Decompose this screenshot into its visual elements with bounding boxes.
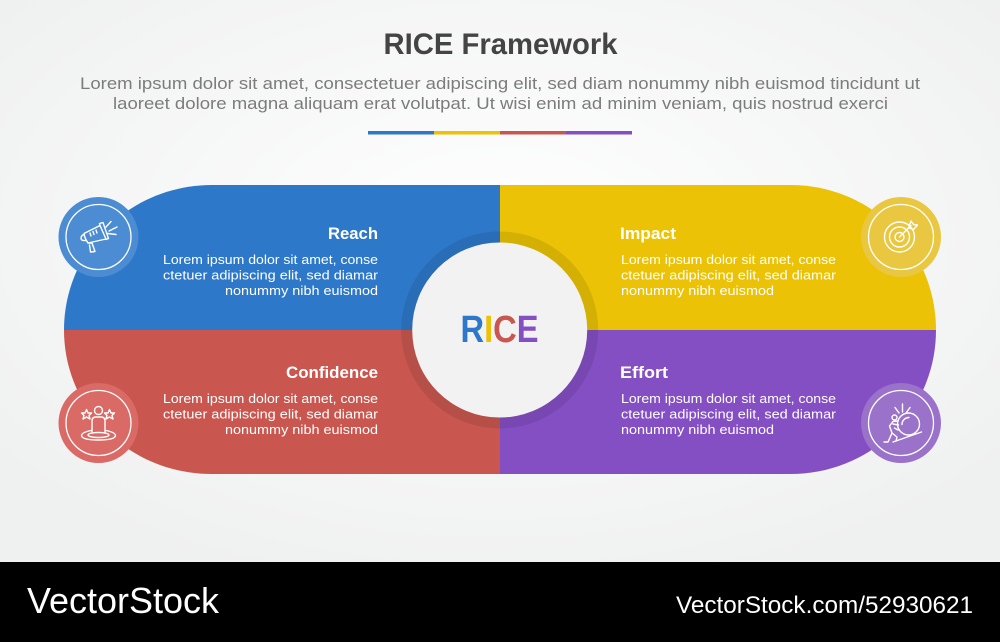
center label RICE: RICE bbox=[460, 309, 538, 351]
effort body text: Lorem ipsum dolor sit amet, conse bbox=[621, 391, 836, 406]
confidence body text: nonummy nibh euismod bbox=[225, 422, 378, 437]
reach heading: Reach bbox=[328, 224, 378, 243]
panel: reach bbox=[64, 185, 500, 330]
icon: megaphone bbox=[58, 197, 138, 277]
reach body text bbox=[163, 252, 379, 298]
effort heading: Effort bbox=[620, 363, 668, 382]
impact body text: Lorem ipsum dolor sit amet, conse bbox=[621, 252, 836, 267]
impact body text bbox=[621, 252, 837, 298]
subtitle text bbox=[80, 74, 920, 113]
effort body text bbox=[621, 391, 837, 437]
panel: impact bbox=[500, 185, 936, 330]
impact body text: nonummy nibh euismod bbox=[621, 283, 774, 298]
center circle bbox=[401, 232, 598, 428]
confidence heading: Confidence bbox=[286, 363, 378, 382]
confidence body text: Lorem ipsum dolor sit amet, conse bbox=[163, 391, 378, 406]
title: RICE Framework bbox=[384, 28, 618, 61]
icon: pushing boulder bbox=[861, 383, 941, 463]
impact body text: ctetuer adipiscing elit, sed diamar bbox=[621, 268, 837, 282]
icon: target bbox=[861, 197, 941, 277]
reach body text: nonummy nibh euismod bbox=[225, 283, 378, 298]
footer bar bbox=[0, 562, 1000, 642]
reach body text: ctetuer adipiscing elit, sed diamar bbox=[163, 268, 379, 282]
impact heading: Impact bbox=[620, 224, 676, 243]
confidence body text bbox=[163, 391, 379, 437]
icon: person with stars bbox=[58, 383, 138, 463]
subtitle text: Lorem ipsum dolor sit amet, consectetuer adipiscing elit, sed diam nonummy nibh euismod tincidunt ut bbox=[80, 74, 920, 93]
reach body text: Lorem ipsum dolor sit amet, conse bbox=[163, 252, 378, 267]
effort body text: ctetuer adipiscing elit, sed diamar bbox=[621, 406, 837, 422]
colour divider bar bbox=[368, 131, 632, 134]
footer url: VectorStock.com/52930621 bbox=[676, 592, 973, 619]
panel: confidence bbox=[64, 330, 500, 474]
subtitle text: laoreet dolore magna aliquam erat volutpat. Ut wisi enim ad minim veniam, quis nostrud exerci bbox=[113, 94, 888, 113]
confidence body text: ctetuer adipiscing elit, sed diamar bbox=[163, 406, 379, 422]
effort body text: nonummy nibh euismod bbox=[621, 422, 774, 437]
footer brand: VectorStock bbox=[27, 580, 220, 621]
panel: effort bbox=[500, 330, 936, 474]
